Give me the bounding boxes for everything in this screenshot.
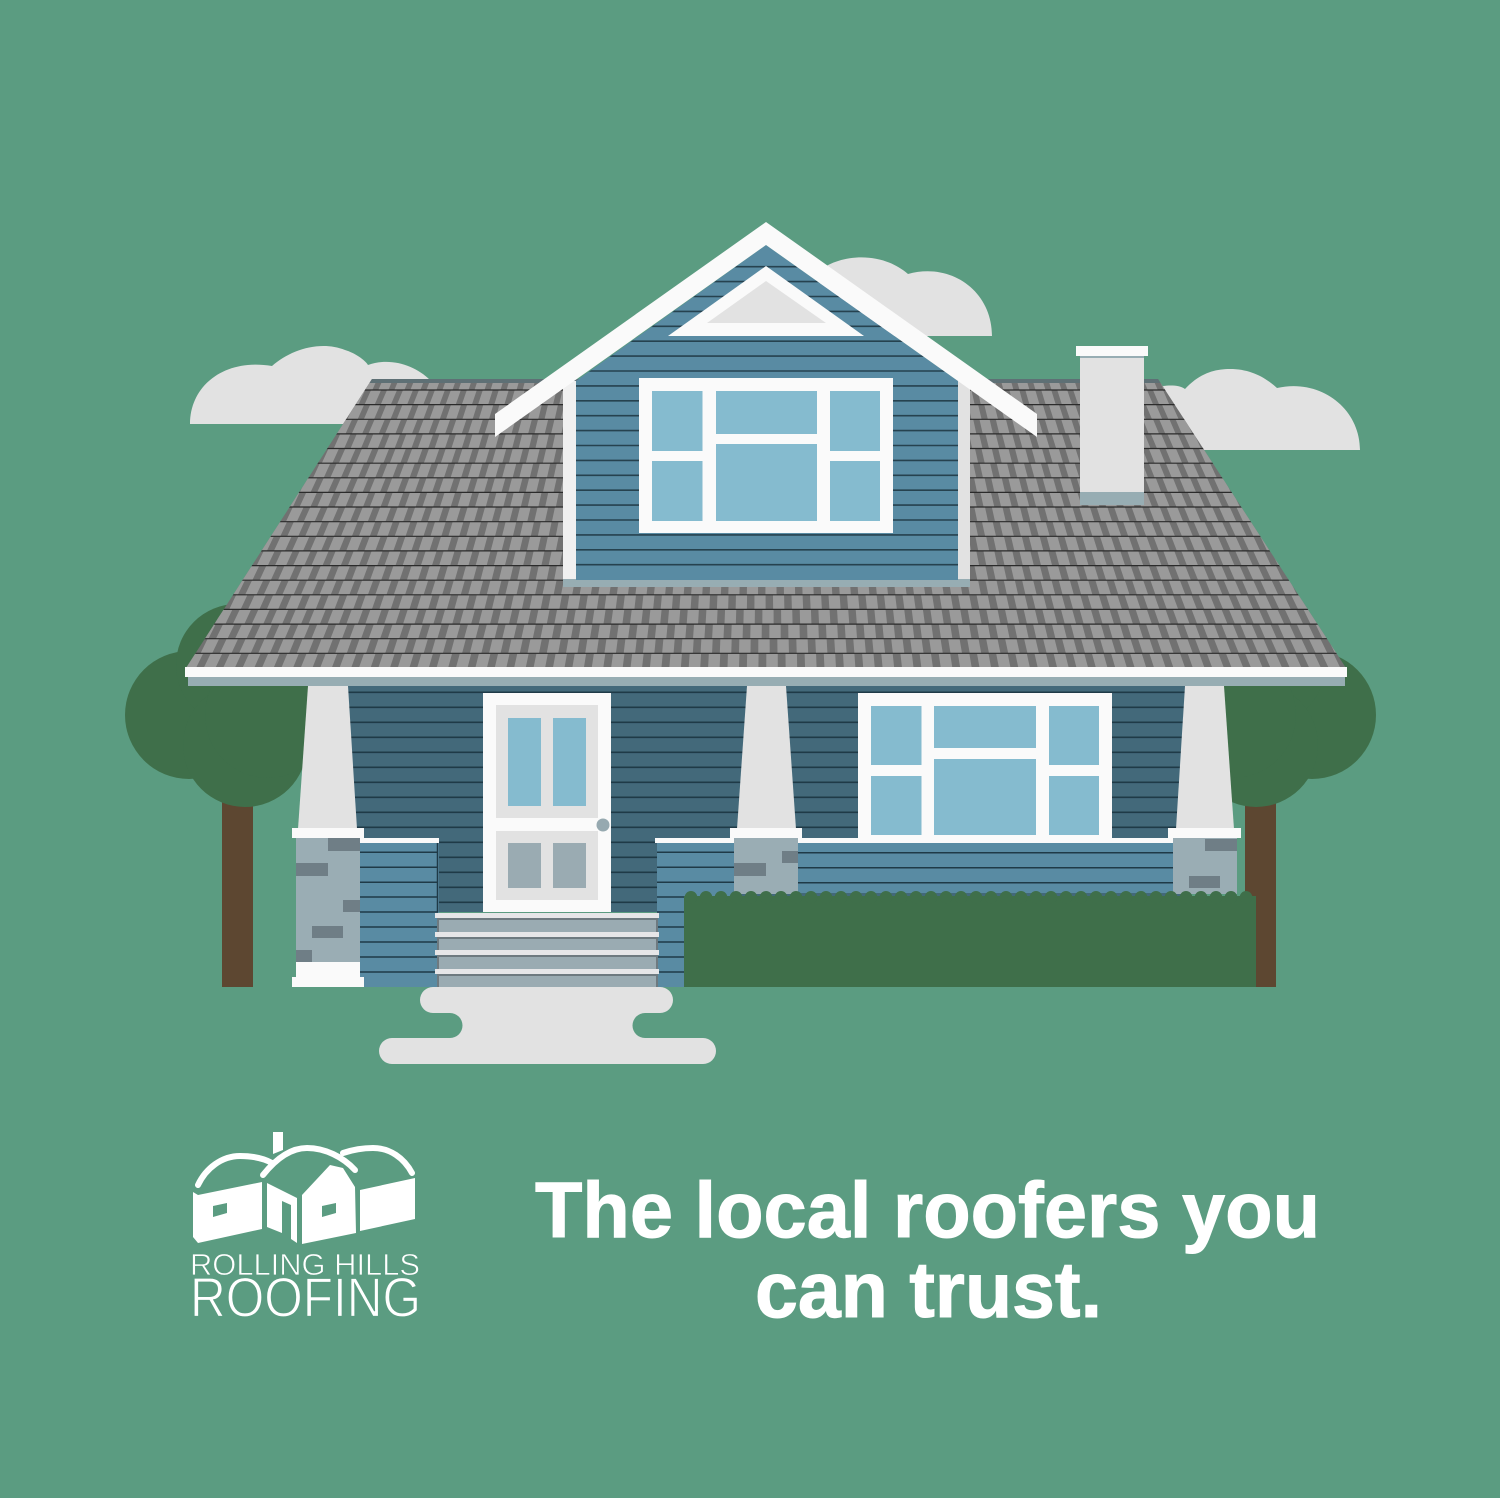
logo text: ROOFING — [190, 1266, 421, 1328]
hedge — [684, 896, 1256, 987]
porch wall: left — [360, 838, 439, 987]
tree: left — [125, 604, 331, 987]
column: centre — [730, 686, 802, 894]
column: right — [1168, 686, 1241, 894]
porch steps — [435, 913, 659, 987]
tagline: The local roofers you — [535, 1165, 1320, 1254]
infographic canvas — [125, 222, 1376, 1318]
porch wall: right — [798, 838, 1174, 893]
dormer gable fascia — [495, 222, 1037, 437]
lower wall with siding — [348, 686, 1185, 912]
dormer — [560, 245, 970, 587]
column: left — [292, 686, 364, 987]
porch wall: centre — [655, 838, 735, 987]
eave fascia — [185, 667, 1347, 686]
chimney — [1076, 346, 1148, 505]
logo icon: houses and hills — [193, 1132, 415, 1244]
dormer window — [639, 378, 893, 533]
dormer gable vent — [668, 266, 864, 336]
main roof — [186, 379, 1346, 667]
tagline: can trust. — [755, 1245, 1102, 1334]
cloud: right — [1163, 369, 1360, 450]
tagline — [535, 1165, 1320, 1334]
cloud: left — [190, 346, 430, 424]
front path — [379, 987, 716, 1064]
logo text: ROLLING HILLS — [190, 1248, 420, 1282]
lower window — [858, 693, 1112, 839]
front door — [483, 693, 611, 912]
tree: right — [1170, 604, 1376, 987]
logo: Rolling Hills Roofing — [190, 1132, 421, 1328]
cloud: top — [820, 257, 992, 336]
